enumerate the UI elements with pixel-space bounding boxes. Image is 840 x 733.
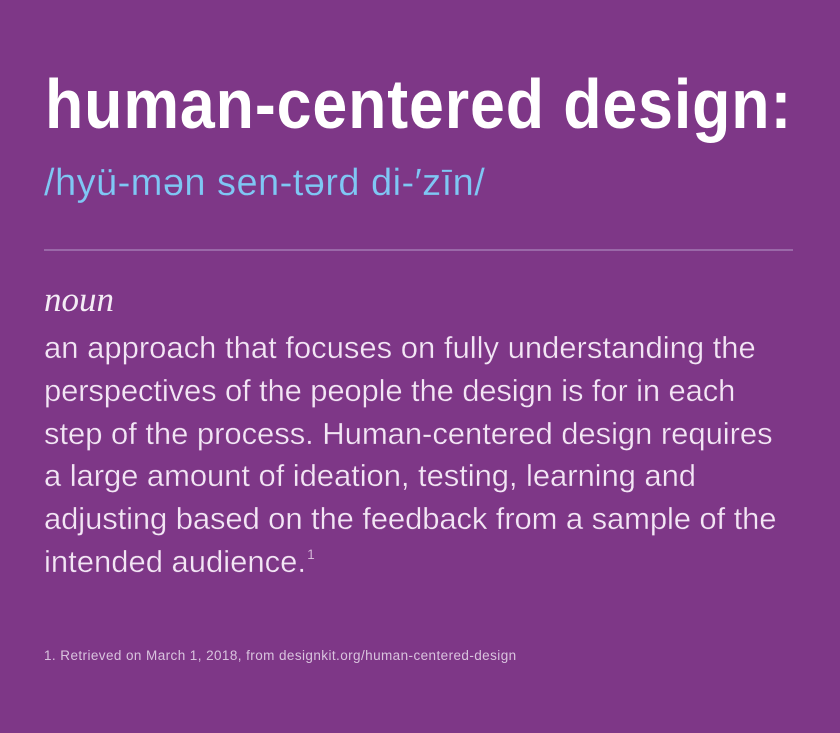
definition text: perspectives of the people the design is for in each — [44, 373, 735, 408]
definition text: adjusting based on the feedback from a sample of the — [44, 501, 776, 536]
definition text: step of the process. Human-centered design requires — [44, 416, 773, 451]
divider — [44, 249, 793, 251]
footnote: 1. Retrieved on March 1, 2018, from designkit.org/human-centered-design — [44, 648, 517, 663]
definition text: an approach that focuses on fully understanding the — [44, 330, 756, 365]
definition text: intended audience.1 — [44, 544, 315, 579]
definition text — [44, 330, 776, 579]
definition text: a large amount of ideation, testing, learning and — [44, 458, 696, 493]
title: human-centered design: — [45, 65, 792, 143]
part of speech: noun — [44, 280, 114, 319]
pronunciation: /hyü-mən sen-tərd di-′zīn/ — [44, 162, 485, 204]
